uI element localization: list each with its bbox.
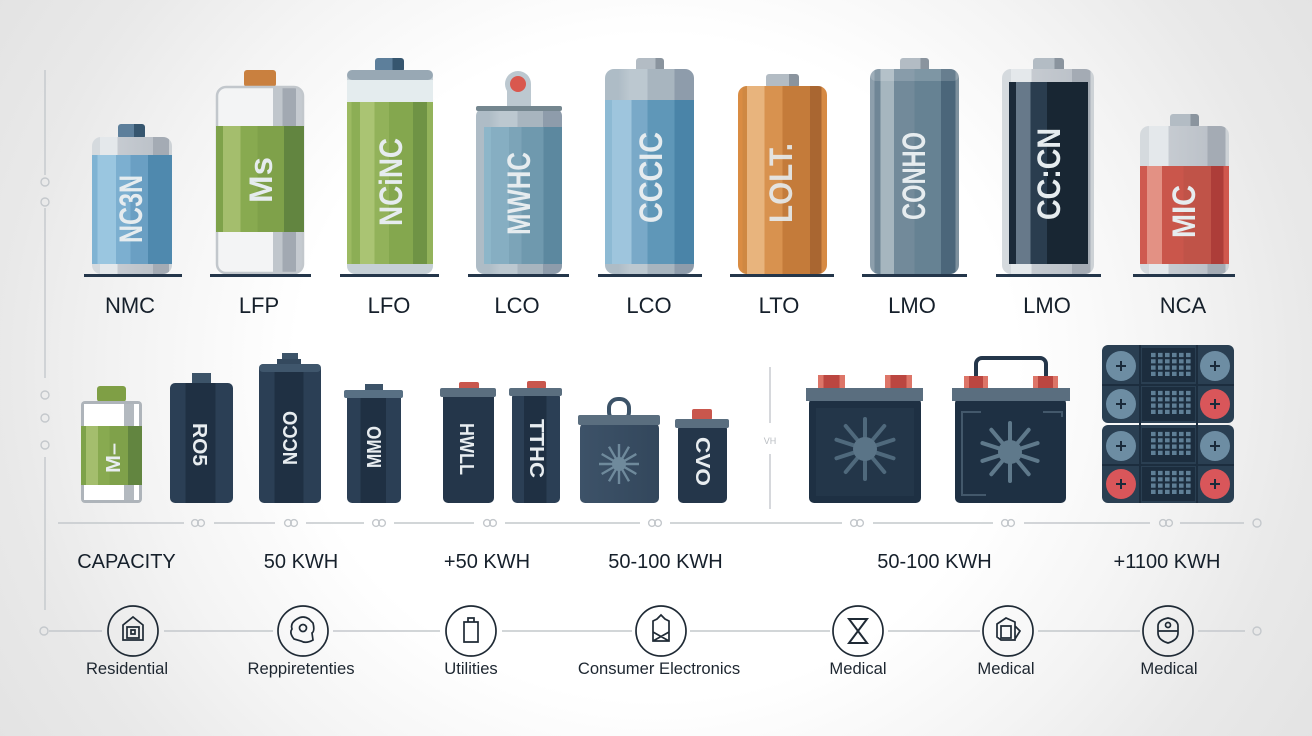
icon: shield — [1143, 606, 1193, 656]
battery: LFO — [340, 58, 439, 277]
battery label: MMO: MMO — [364, 426, 386, 468]
battery: NMC — [84, 124, 182, 277]
label: Residential: Residential — [86, 659, 168, 678]
label: Reppiretenties: Reppiretenties — [247, 659, 355, 678]
battery: NCA — [1133, 114, 1235, 277]
label: Medical: Medical — [977, 659, 1035, 678]
icon: residential — [108, 606, 158, 656]
battery label: CC:CN: CC:CN — [1031, 128, 1067, 220]
capacity: 50-100 KWH: 50-100 KWH — [877, 551, 992, 573]
small battery: dark 2 — [259, 353, 321, 503]
capacity: +50 KWH: +50 KWH — [444, 551, 530, 573]
capacity label: CAPACITY — [77, 551, 176, 573]
label: LMO: LMO — [888, 293, 936, 318]
label: LFP: LFP — [239, 293, 279, 318]
battery label: LOLT: LOLT. — [763, 143, 799, 223]
large battery: sun 2 with handle — [952, 358, 1070, 503]
label: Medical: Medical — [1140, 659, 1198, 678]
battery label: M: M– — [103, 443, 125, 473]
large battery: sun 1 — [806, 375, 923, 503]
small battery: dark 6 — [675, 409, 729, 503]
label: Medical: Medical — [829, 659, 887, 678]
battery: LMO slate — [862, 58, 967, 277]
label: Utilities: Utilities — [444, 659, 498, 678]
capacity: 50-100 KWH: 50-100 KWH — [608, 551, 723, 573]
battery: LCO blue — [598, 58, 702, 277]
icon: utilities — [446, 606, 496, 656]
left axis: upper — [41, 70, 49, 610]
small battery: dark 4 — [440, 382, 496, 503]
battery label: NCiNC: NCiNC — [373, 138, 409, 226]
battery pack grid — [1102, 345, 1234, 503]
battery label: TTHC: TTHC — [525, 419, 547, 478]
small battery: dark 3 — [344, 384, 403, 503]
icon: consumer electronics — [636, 606, 686, 656]
small battery: square with handle — [578, 399, 660, 503]
label: LFO: LFO — [368, 293, 410, 318]
icon: sun — [982, 423, 1038, 481]
icon: medical box — [983, 606, 1033, 656]
battery label: CVO: CVO — [691, 437, 713, 486]
battery label: NCCO: NCCO — [280, 411, 302, 465]
battery label: MIC: MIC — [1166, 185, 1202, 238]
divider mark: VH — [764, 436, 776, 446]
label: NMC: NMC — [105, 293, 155, 318]
label: LCO: LCO — [626, 293, 672, 318]
application timeline — [40, 627, 1261, 635]
small battery: dark 5 — [509, 381, 562, 503]
label: LMO: LMO — [1023, 293, 1071, 318]
capacity: 50 KWH: 50 KWH — [264, 551, 338, 573]
label: LCO: LCO — [494, 293, 540, 318]
battery label: CCCIC: CCCIC — [633, 132, 669, 223]
icon: sun — [599, 444, 639, 484]
capacity: +1100 KWH: +1100 KWH — [1114, 551, 1220, 573]
small battery: green — [81, 386, 142, 503]
battery label: Ms: Ms — [243, 157, 279, 203]
label: LTO: LTO — [759, 293, 799, 318]
icon: hourglass — [833, 606, 883, 656]
label: Consumer Electronics: Consumer Electronics — [578, 659, 740, 678]
capacity timeline — [58, 519, 1261, 527]
battery label: NC3N: NC3N — [113, 175, 149, 243]
label: NCA: NCA — [1160, 293, 1207, 318]
battery: LCO tab — [468, 71, 569, 277]
battery: LFP — [210, 70, 311, 277]
battery: LMO dark — [996, 58, 1101, 277]
battery label: 50R: RO5 — [188, 423, 210, 466]
battery label: HWLL: HWLL — [455, 423, 477, 475]
icon: repairs gear — [278, 606, 328, 656]
icon: sun — [836, 419, 894, 479]
battery label: MWHC: MWHC — [501, 152, 537, 235]
battery: LTO — [730, 74, 834, 277]
battery label: CONHO: CONHO — [896, 132, 932, 220]
small battery: dark 1 — [170, 373, 233, 503]
